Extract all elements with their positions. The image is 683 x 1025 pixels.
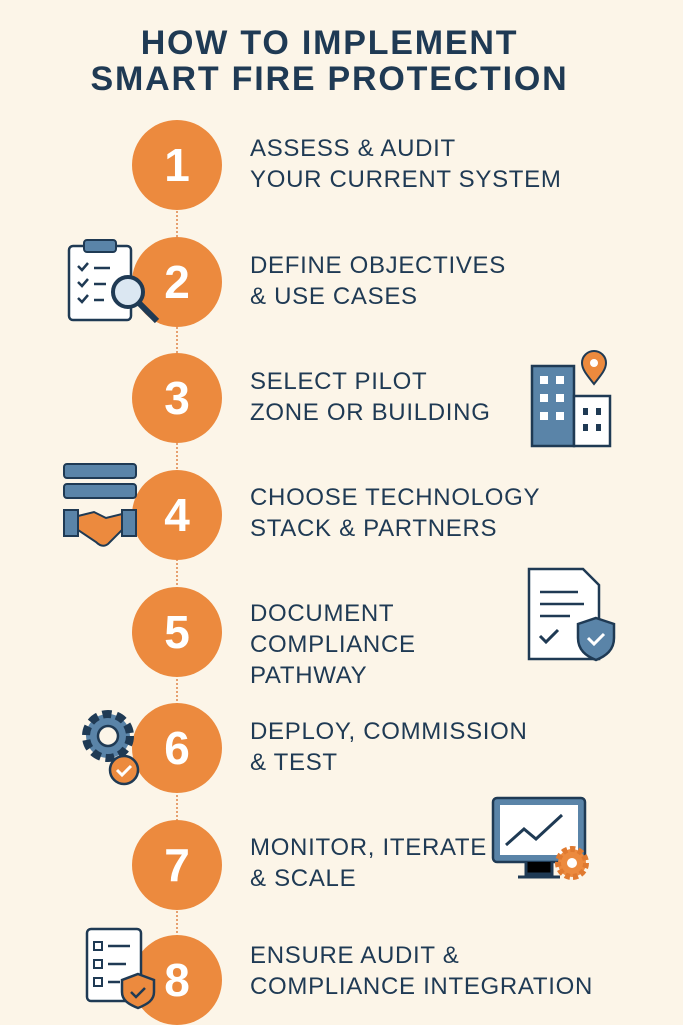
text: & USE CASES — [250, 283, 418, 310]
title: SMART FIRE PROTECTION — [91, 60, 568, 98]
step 2 — [132, 237, 506, 327]
text: ENSURE AUDIT & — [250, 942, 459, 969]
step 4 — [132, 470, 540, 560]
step 1 — [132, 120, 562, 210]
title: HOW TO IMPLEMENT — [141, 24, 518, 62]
text: COMPLIANCE INTEGRATION — [250, 973, 593, 1000]
text: 7 — [164, 839, 190, 891]
icon: building with pin — [530, 350, 612, 448]
text: 6 — [164, 722, 190, 774]
step 3 — [132, 353, 491, 443]
icon: monitor chart gear — [492, 796, 589, 880]
icon: document with shield — [528, 568, 616, 662]
step 5 — [132, 587, 416, 689]
icon: clipboard magnifier — [68, 239, 160, 324]
text: STACK & PARTNERS — [250, 515, 497, 542]
text: YOUR CURRENT SYSTEM — [250, 166, 562, 193]
text: 1 — [164, 139, 190, 191]
text: ASSESS & AUDIT — [250, 135, 456, 162]
step 8 — [142, 935, 593, 1025]
text: 2 — [164, 256, 190, 308]
text: SELECT PILOT — [250, 368, 427, 395]
text: COMPLIANCE — [250, 631, 416, 658]
text: 3 — [164, 372, 190, 424]
text: DOCUMENT — [250, 600, 394, 627]
icon: stack and handshake — [63, 463, 137, 547]
step 7 — [132, 820, 487, 910]
text: CHOOSE TECHNOLOGY — [250, 484, 540, 511]
title — [91, 24, 568, 98]
step 6 — [132, 703, 528, 793]
icon: checklist with shield — [86, 928, 156, 1010]
text: & TEST — [250, 749, 338, 776]
text: PATHWAY — [250, 662, 367, 689]
icon: gear with check — [82, 710, 140, 786]
text: 8 — [164, 954, 190, 1006]
text: 4 — [164, 489, 190, 541]
text: MONITOR, ITERATE — [250, 834, 487, 861]
text: ZONE OR BUILDING — [250, 399, 491, 426]
text: DEPLOY, COMMISSION — [250, 718, 528, 745]
text: 5 — [164, 606, 190, 658]
text: & SCALE — [250, 865, 356, 892]
text: DEFINE OBJECTIVES — [250, 252, 506, 279]
